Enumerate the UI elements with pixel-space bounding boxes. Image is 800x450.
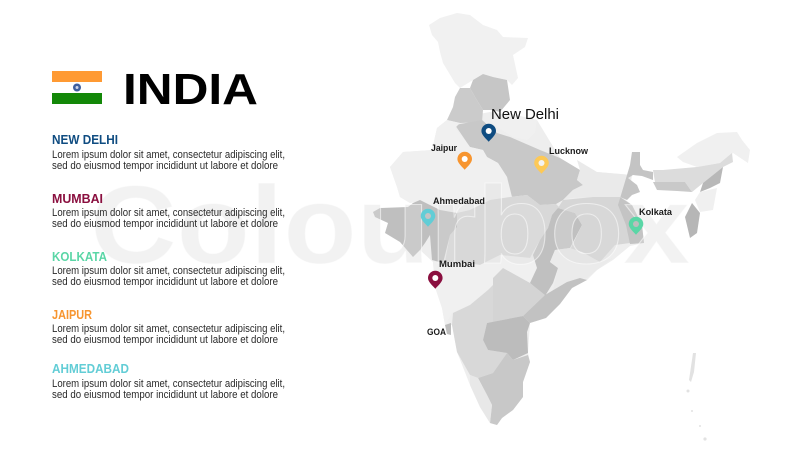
pin: Ahmedabad xyxy=(421,209,435,227)
state: Punjab xyxy=(447,88,483,123)
text block: Jaipur: Lorem ipsum dolor sit amet, consectetur adipiscing elit, xyxy=(52,323,285,335)
text block: Mumbai: sed do eiusmod tempor incididunt ut labore et dolore xyxy=(52,218,278,230)
label: Ahmedabad: Ahmedabad xyxy=(433,196,485,207)
state: Bihar xyxy=(563,160,632,200)
state: Odisha xyxy=(550,248,613,290)
text block: New Delhi: NEW DELHI xyxy=(52,133,118,147)
text block: Jaipur: JAIPUR xyxy=(52,308,92,322)
text block: Ahmedabad: Lorem ipsum dolor sit amet, consectetur adipiscing elit, xyxy=(52,378,285,390)
state: Goa xyxy=(445,323,451,335)
state: Arunachal Pradesh xyxy=(677,132,750,167)
watermark: Colourbox xyxy=(90,164,690,287)
state: Rajasthan xyxy=(390,120,512,213)
label: Kolkata: Kolkata xyxy=(639,207,673,218)
state: Meghalaya xyxy=(653,182,692,192)
state: Madhya Pradesh xyxy=(445,195,560,265)
text block: Jaipur xyxy=(52,308,285,346)
state: Manipur xyxy=(695,188,717,212)
pin: Lucknow xyxy=(534,156,549,174)
state: Himachal Pradesh xyxy=(470,74,510,112)
label: Goa: GOA xyxy=(427,327,446,338)
state: Chhattisgarh xyxy=(530,208,582,296)
text block: Ahmedabad: AHMEDABAD xyxy=(52,362,129,376)
text block: Kolkata: sed do eiusmod tempor incididunt ut labore et dolore xyxy=(52,276,278,288)
label: Jaipur: Jaipur xyxy=(431,143,457,154)
state: Uttarakhand xyxy=(490,113,537,140)
state: Uttar Pradesh and Haryana xyxy=(455,120,583,205)
state: Gujarat xyxy=(373,200,457,263)
state: Jammu and Kashmir xyxy=(429,13,528,88)
label: Mumbai: Mumbai xyxy=(439,259,475,270)
text block: Mumbai xyxy=(52,192,285,230)
state: Maharashtra xyxy=(433,255,537,325)
text block: Mumbai: Lorem ipsum dolor sit amet, consectetur adipiscing elit, xyxy=(52,207,285,219)
map of India xyxy=(373,13,750,441)
text block: New Delhi: Lorem ipsum dolor sit amet, consectetur adipiscing elit, xyxy=(52,149,285,161)
state: West Bengal xyxy=(618,152,653,244)
title: INDIA xyxy=(123,65,258,114)
state: Karnataka xyxy=(452,285,507,378)
state: Kerala xyxy=(470,375,492,423)
state: Tamil Nadu xyxy=(478,353,530,425)
state: Andhra Pradesh coast xyxy=(523,278,587,323)
text block: Ahmedabad xyxy=(52,362,285,401)
text block: Jaipur: sed do eiusmod tempor incididunt ut labore et dolore xyxy=(52,334,278,346)
state: Telangana north xyxy=(493,268,545,322)
state: Jharkhand xyxy=(558,197,630,262)
text block: New Delhi xyxy=(52,133,285,172)
text block: Kolkata: KOLKATA xyxy=(52,250,107,264)
state: Mizoram xyxy=(685,203,700,238)
text block: Ahmedabad: sed do eiusmod tempor incididunt ut labore et dolore xyxy=(52,389,278,401)
state: Telangana xyxy=(483,316,530,360)
text block: Kolkata xyxy=(52,250,285,288)
state: Assam xyxy=(653,153,733,192)
text block: Kolkata: Lorem ipsum dolor sit amet, consectetur adipiscing elit, xyxy=(52,265,285,277)
label: New Delhi: New Delhi xyxy=(491,107,559,123)
icon: Indian flag xyxy=(52,71,102,104)
mainland base xyxy=(390,112,644,425)
label: Lucknow: Lucknow xyxy=(549,146,589,157)
state: Nagaland xyxy=(700,167,723,192)
islands: Andaman and Nicobar xyxy=(686,353,707,441)
pin: Mumbai xyxy=(428,271,443,289)
pin: Jaipur xyxy=(457,152,472,170)
text block: New Delhi: sed do eiusmod tempor incididunt ut labore et dolore xyxy=(52,160,278,172)
text block: Mumbai: MUMBAI xyxy=(52,192,103,206)
pin: New Delhi xyxy=(481,124,496,142)
pin: Kolkata xyxy=(629,217,643,235)
